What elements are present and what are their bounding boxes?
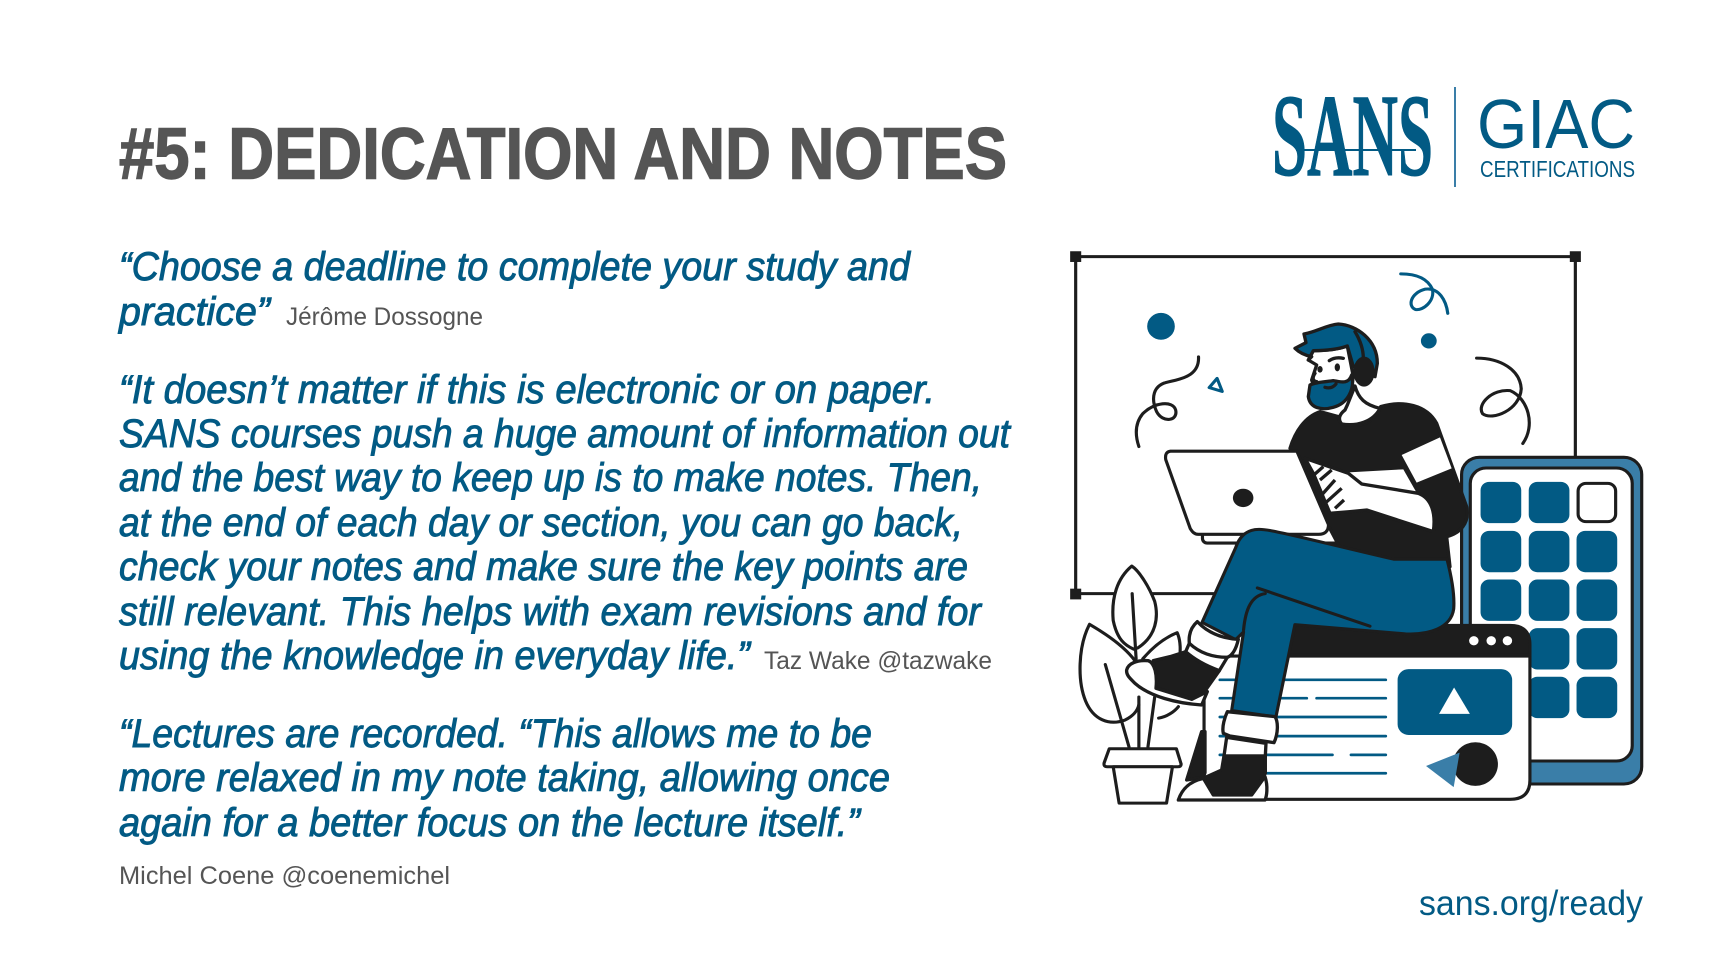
icon: tablet with app grid [1462, 457, 1642, 784]
logo: SANS GIAC Certifications: GIAC [1477, 85, 1635, 163]
quote: Taz Wake: still relevant. This helps with exam revisions and for [119, 590, 983, 634]
quote: Michel Coene: “Lectures are recorded. “This allows me to be [119, 712, 872, 756]
quote: Taz Wake: “It doesn’t matter if this is electronic or on paper. [119, 368, 935, 412]
quote: Michel Coene: more relaxed in my note taking, allowing once [119, 756, 890, 800]
icon: man sitting [1127, 324, 1467, 800]
shoes and cuffs [1127, 622, 1277, 800]
logo: SANS GIAC Certifications: CERTIFICATIONS [1480, 156, 1635, 182]
quote: Jérôme Dossogne [118, 245, 912, 334]
quote: Jérôme Dossogne: practice” [118, 290, 272, 334]
quote: Taz Wake: at the end of each day or section, you can go back, [119, 501, 963, 545]
quote: Jérôme Dossogne: “Choose a deadline to complete your study and [119, 245, 912, 289]
quote: Michel Coene: again for a better focus on the lecture itself.” [119, 801, 862, 845]
icon: browser window [1204, 625, 1530, 799]
title: #5: DEDICATION AND NOTES [119, 114, 1007, 194]
quote: Taz Wake: SANS courses push a huge amount of information out [119, 412, 1012, 456]
icon: selection frame [1070, 251, 1581, 599]
icon: confetti shapes [1136, 274, 1529, 447]
icon: potted plant [1080, 566, 1181, 803]
quote: Taz Wake: Taz Wake @tazwake [764, 647, 992, 675]
quote: Taz Wake: using the knowledge in everyday life.” [119, 634, 752, 678]
website link: sans.org/ready [1419, 884, 1643, 923]
laptop base [1202, 525, 1366, 543]
quote: Michel Coene [119, 712, 890, 890]
jeans [1202, 529, 1454, 717]
laptop [1166, 451, 1328, 534]
quote: Taz Wake [119, 368, 1012, 678]
quote: Michel Coene: Michel Coene @coenemichel [119, 862, 450, 890]
quote: Taz Wake: and the best way to keep up is to make notes. Then, [119, 456, 982, 500]
illustration: man with laptop [1070, 251, 1642, 803]
logo: SANS GIAC Certifications: SANS [1272, 70, 1433, 201]
quote: Taz Wake: check your notes and make sure the key points are [119, 545, 968, 589]
quote: Jérôme Dossogne: Jérôme Dossogne [286, 303, 483, 331]
torso and head [1290, 324, 1467, 567]
